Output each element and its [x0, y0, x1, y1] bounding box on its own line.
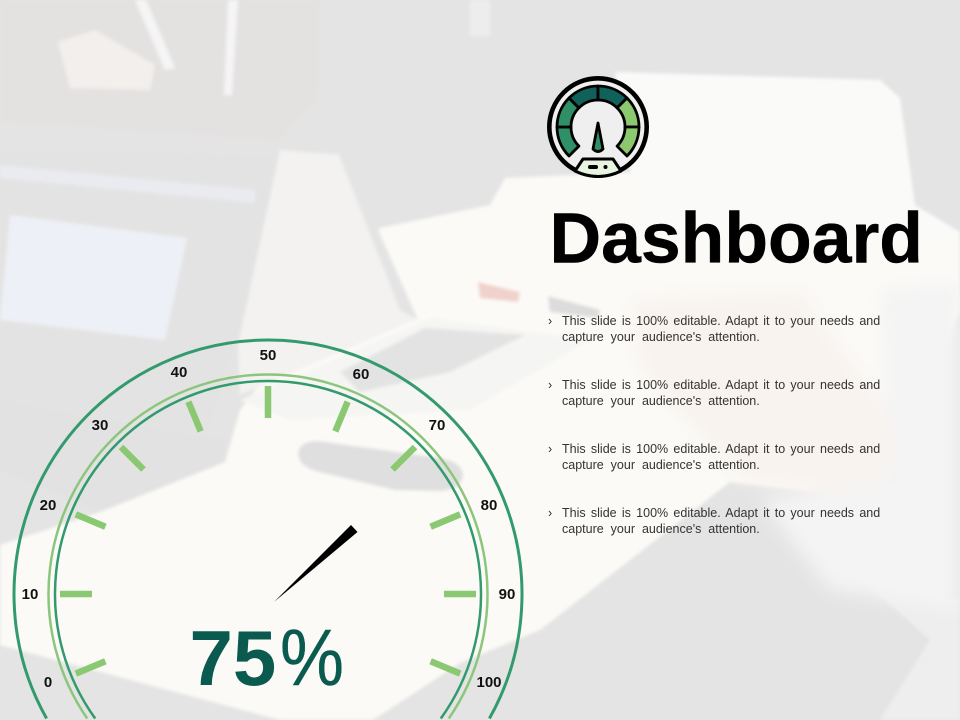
- scale labels: 60: [353, 366, 369, 383]
- bullet 1: [548, 314, 880, 344]
- bullet list: [548, 314, 880, 536]
- needle: [274, 525, 358, 602]
- scale labels: 30: [92, 417, 108, 434]
- icon dial: [549, 78, 647, 176]
- bullet 2: [548, 378, 880, 408]
- bullet 3: ›: [548, 442, 552, 456]
- bullet 1: ›: [548, 314, 552, 328]
- bullet 3: This slide is 100% editable. Adapt it to your needs and: [562, 442, 880, 456]
- icon base dot: [604, 165, 608, 169]
- bullet 4: [548, 506, 880, 536]
- value: 75%: 75: [190, 614, 276, 702]
- outer ring: [14, 340, 522, 718]
- bullet 1: This slide is 100% editable. Adapt it to your needs and: [562, 314, 880, 328]
- icon colored gauge band: [557, 86, 639, 156]
- bullet 3: capture your audience's attention.: [562, 458, 760, 472]
- bullet 3: [548, 442, 880, 472]
- bullet 4: ›: [548, 506, 552, 520]
- bullet 1: capture your audience's attention.: [562, 330, 760, 344]
- value: 75%: [190, 613, 344, 702]
- scale labels: 20: [40, 497, 56, 514]
- bullet 4: capture your audience's attention.: [562, 522, 760, 536]
- bullet 2: This slide is 100% editable. Adapt it to your needs and: [562, 378, 880, 392]
- tick marks: [60, 386, 476, 674]
- inner ring: [55, 381, 481, 718]
- bullet 2: capture your audience's attention.: [562, 394, 760, 408]
- scale labels: [22, 347, 515, 691]
- light ring: [49, 375, 488, 718]
- scale labels: 10: [22, 586, 38, 603]
- bullet 4: This slide is 100% editable. Adapt it to your needs and: [562, 506, 880, 520]
- value: 75%: %: [280, 613, 344, 702]
- scale labels: 50: [260, 347, 276, 364]
- bullet 2: ›: [548, 378, 552, 392]
- gauge chart: [14, 340, 522, 718]
- icon: speedometer: [549, 78, 647, 176]
- icon base plate: [575, 159, 621, 176]
- scale labels: 0: [44, 674, 52, 691]
- scale labels: 80: [481, 497, 497, 514]
- icon needle: [593, 123, 603, 152]
- icon base pill: [588, 165, 598, 169]
- scale labels: 40: [171, 364, 187, 381]
- scale labels: 70: [429, 417, 445, 434]
- scale labels: 90: [499, 586, 515, 603]
- scale labels: 100: [476, 674, 502, 691]
- title: Dashboard: [550, 198, 923, 278]
